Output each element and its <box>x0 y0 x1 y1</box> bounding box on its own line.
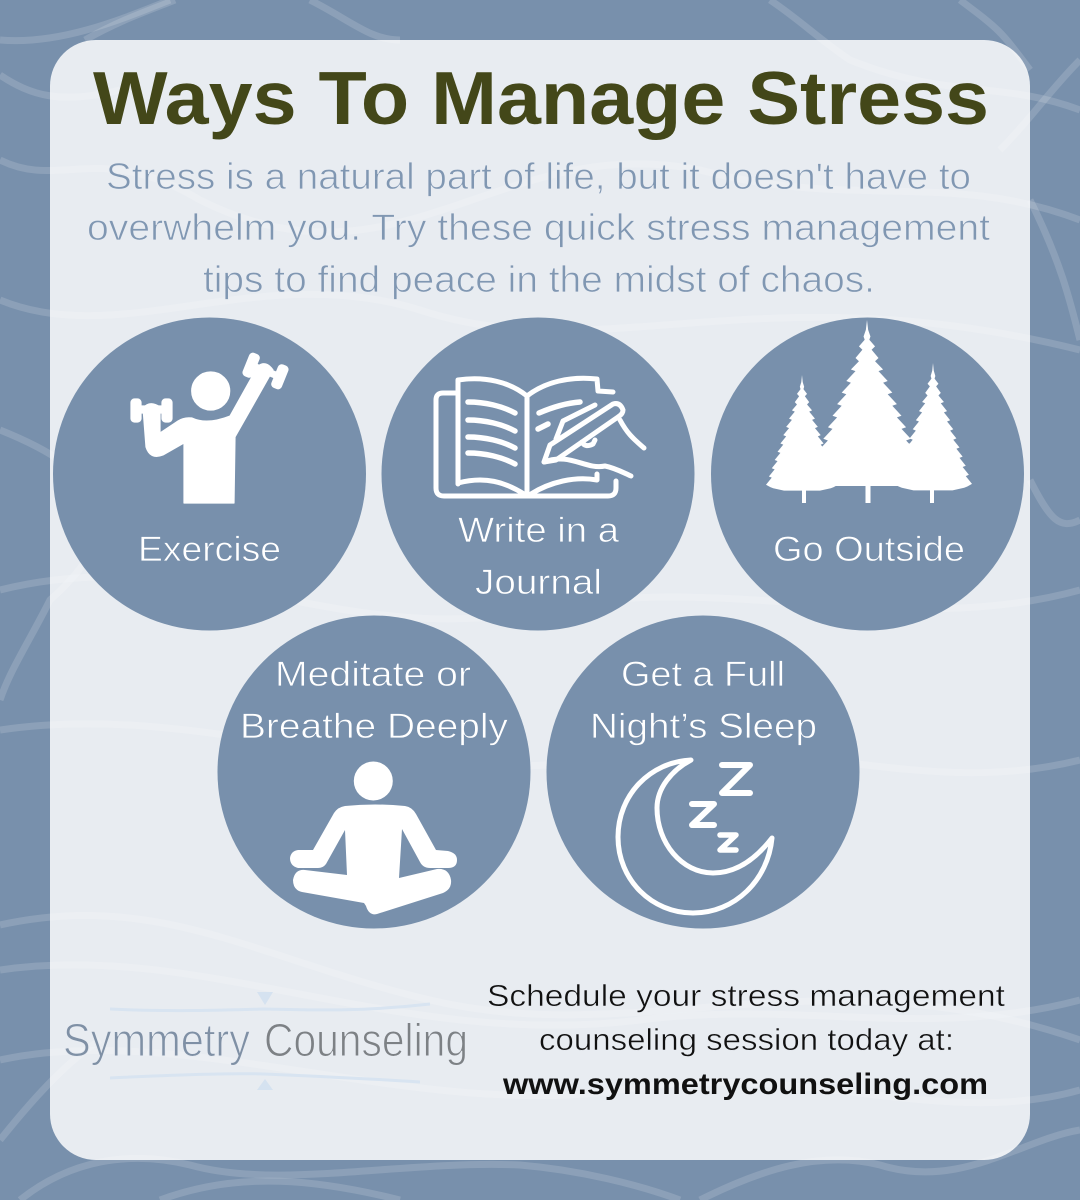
label: write in a journal: Write in a <box>458 511 620 550</box>
panel: journal <box>382 318 694 630</box>
intro text <box>87 156 991 300</box>
panel: go outside <box>711 318 1024 630</box>
label: get a full night's sleep: Night’s Sleep <box>590 707 817 746</box>
label: write in a journal: Journal <box>475 563 602 602</box>
logo: Symmetry Counseling: Symmetry <box>63 1014 250 1066</box>
label: exercise: Exercise <box>138 530 281 569</box>
label: meditate or breathe deeply <box>240 655 509 746</box>
intro text: Stress is a natural part of life, but it doesn't have to <box>106 156 971 197</box>
label: write in a journal <box>458 511 620 602</box>
call to action: www.symmetrycounseling.com <box>502 1068 988 1101</box>
panel: exercise <box>53 318 366 630</box>
intro text: overwhelm you. Try these quick stress management <box>87 207 991 248</box>
intro text: tips to find peace in the midst of chaos. <box>203 259 875 300</box>
logo: Symmetry Counseling <box>63 992 468 1090</box>
label: meditate or breathe deeply: Breathe Deeply <box>240 707 509 746</box>
panel: meditate <box>218 616 530 928</box>
call to action: counseling session today at: <box>539 1022 954 1057</box>
label: meditate or breathe deeply: Meditate or <box>275 655 471 694</box>
icon: crescent moon with Zs <box>618 760 772 913</box>
icon: seated meditating person <box>290 762 457 914</box>
call to action: Schedule your stress management <box>487 978 1005 1013</box>
title: Ways To Manage Stress <box>93 56 989 140</box>
icon: person lifting dumbbells <box>131 352 289 503</box>
call to action <box>487 978 1005 1101</box>
label: go outside: Go Outside <box>773 530 965 569</box>
label: get a full night's sleep <box>590 655 817 746</box>
label: get a full night's sleep: Get a Full <box>621 655 785 694</box>
icon: open journal and writing hand <box>436 378 644 496</box>
panel: sleep <box>546 616 860 928</box>
icon: three pine trees <box>766 320 972 503</box>
logo: Symmetry Counseling: Counseling <box>264 1014 468 1066</box>
